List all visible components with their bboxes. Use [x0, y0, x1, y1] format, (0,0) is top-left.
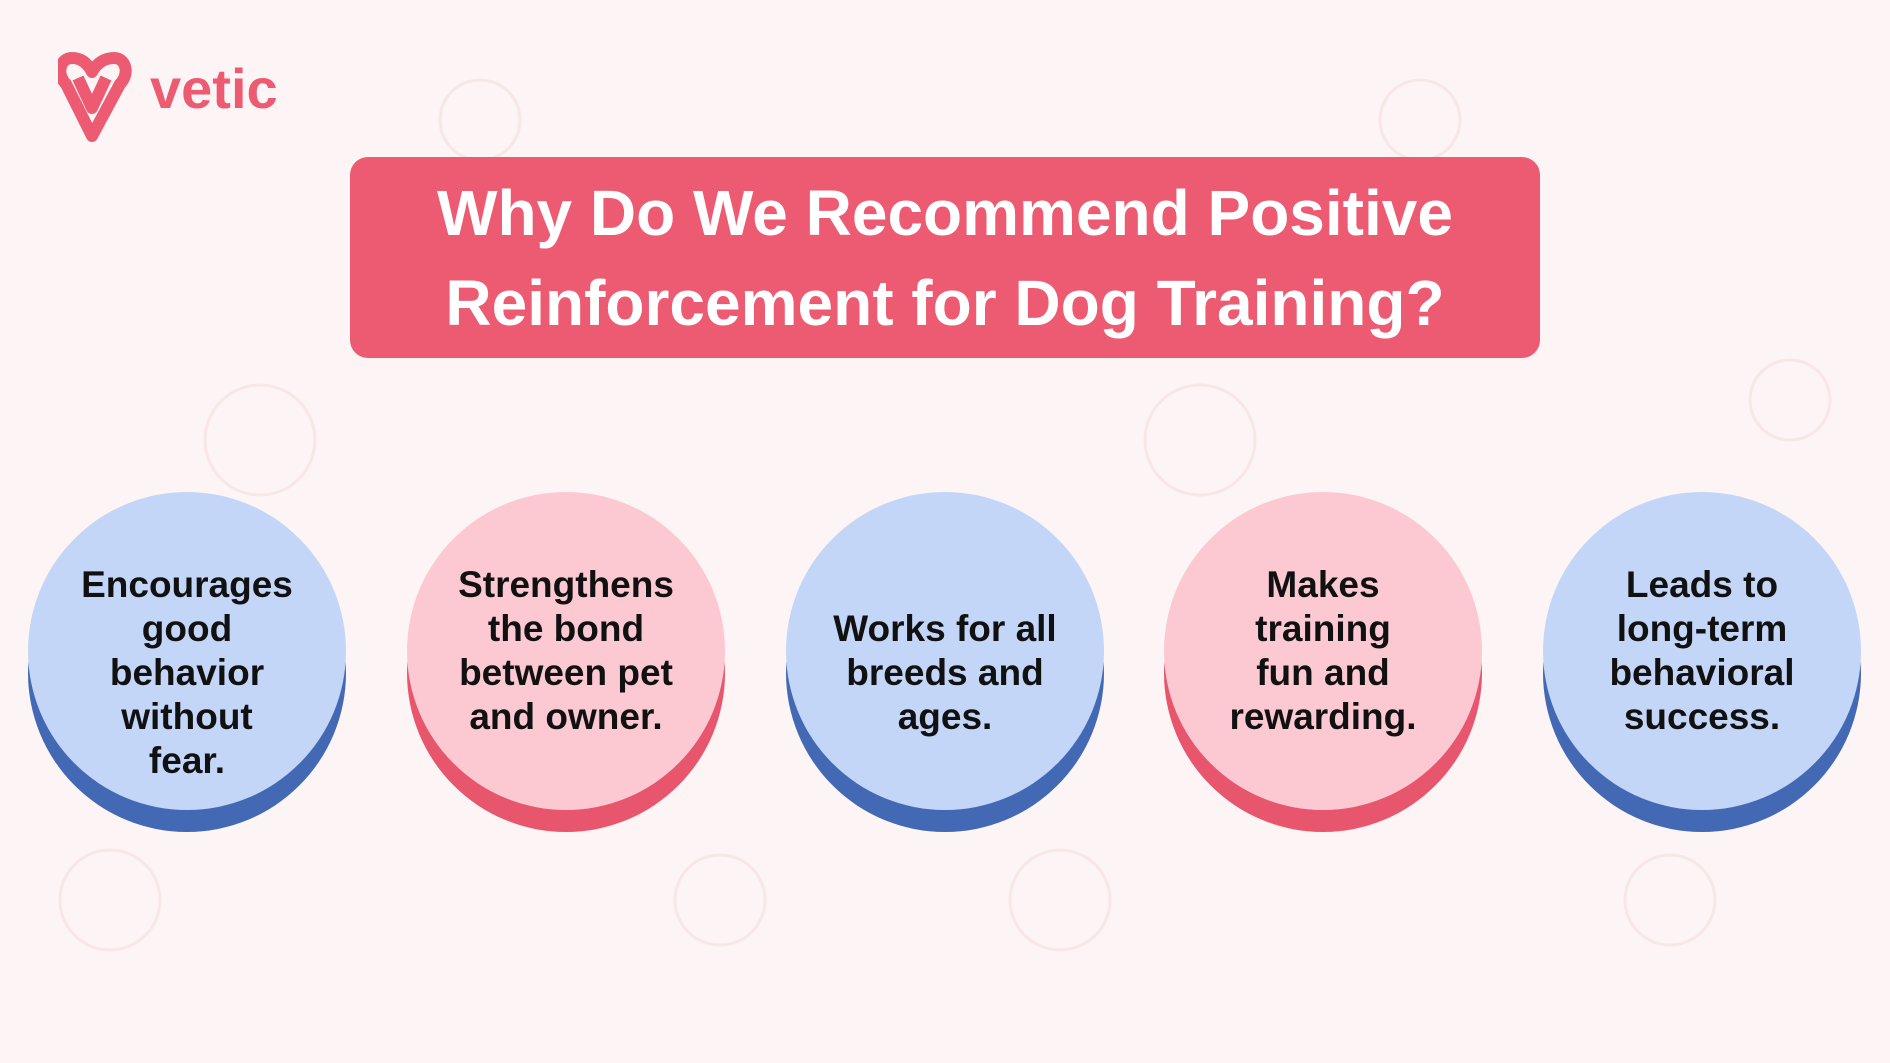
title: Why Do We Recommend Positive [437, 176, 1453, 248]
circle 2: Strengthens [458, 564, 674, 605]
circle 4: Makes [1266, 564, 1380, 605]
circle 1: behavior [110, 652, 264, 693]
circle 2: and owner. [469, 696, 663, 737]
logo [58, 52, 278, 142]
circle 1: without [121, 696, 253, 737]
circle 4: training [1255, 608, 1391, 649]
circle 3: breeds and [846, 652, 1044, 693]
circle 3 [786, 492, 1104, 832]
title: Reinforcement for Dog Training? [445, 266, 1445, 338]
circle 4 [1164, 492, 1482, 832]
circle 5 [1543, 492, 1861, 832]
icon: heart V [60, 58, 126, 136]
circle 4: rewarding. [1229, 696, 1417, 737]
circle 1: Encourages [81, 564, 293, 605]
circle 5: behavioral [1609, 652, 1795, 693]
circle 5: Leads to [1626, 564, 1778, 605]
logo: vetic [150, 57, 278, 120]
circle 1: good [142, 608, 232, 649]
circle 5: success. [1624, 696, 1780, 737]
circle 5: long-term [1617, 608, 1787, 649]
circle 2: between pet [459, 652, 673, 693]
circle 2: the bond [488, 608, 644, 649]
title [350, 157, 1540, 358]
circle 3: Works for all [833, 608, 1057, 649]
circle 1: fear. [149, 740, 225, 781]
circle 3: ages. [898, 696, 992, 737]
circle 4: fun and [1256, 652, 1390, 693]
circle 1 [28, 492, 346, 832]
circle 2 [407, 492, 725, 832]
